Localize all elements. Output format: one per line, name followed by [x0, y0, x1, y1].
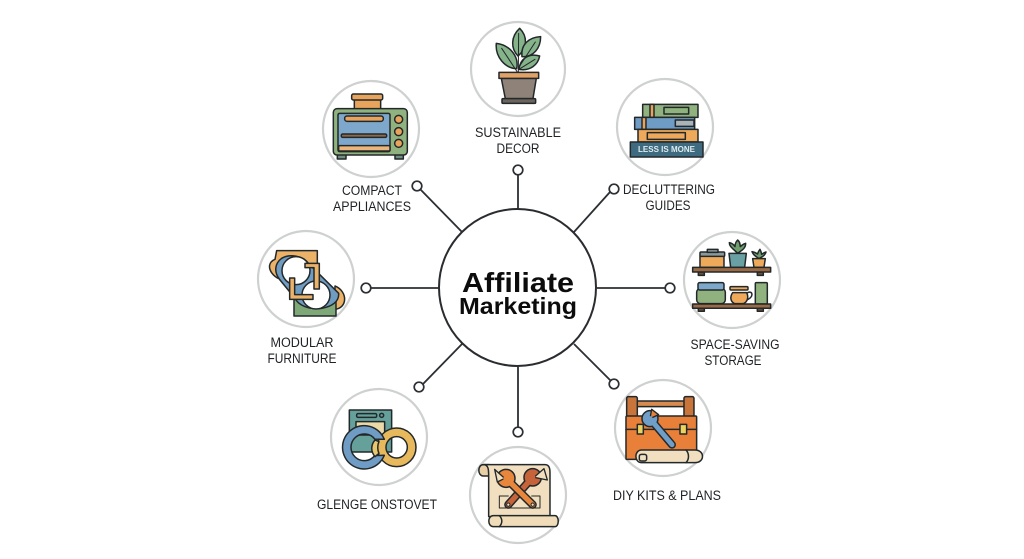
label: modular furniture: MODULAR: [270, 335, 334, 350]
icon: storage shelves: [684, 232, 780, 328]
label: compact appliances: [333, 183, 411, 214]
icon: modular furniture: [258, 231, 354, 327]
label: glenge onstovet: GLENGE ONSTOVET: [317, 497, 437, 512]
central hub: Affiliate Marketing: Affiliate: [462, 267, 574, 298]
label: sustainable decor: SUSTAINABLE: [475, 125, 561, 140]
central hub: Affiliate Marketing: Marketing: [459, 293, 577, 319]
label: compact appliances: APPLIANCES: [333, 199, 411, 214]
icon: stove with rings: [331, 389, 427, 485]
label: modular furniture: [268, 335, 336, 366]
icon: compact oven: [323, 81, 419, 177]
label: decluttering guides: DECLUTTERING: [623, 182, 715, 197]
label: decluttering guides: GUIDES: [646, 198, 690, 213]
label: DIY kits and plans: DIY KITS & PLANS: [613, 488, 721, 503]
icon: stacked books: [617, 79, 713, 175]
icon: blueprint scroll with crossed wrenches: [470, 447, 566, 543]
label: sustainable decor: [475, 125, 561, 156]
label: modular furniture: FURNITURE: [268, 351, 336, 366]
connector lines and end nodes: [361, 165, 675, 437]
icon: stacked books: LESS IS MONE: [638, 144, 695, 154]
label: space-saving storage: STORAGE: [704, 353, 762, 368]
central hub: Affiliate Marketing: [439, 209, 596, 366]
icon: potted plant: [471, 22, 565, 116]
label: space-saving storage: [690, 337, 780, 368]
label: compact appliances: COMPACT: [342, 183, 402, 198]
label: space-saving storage: SPACE-SAVING: [690, 337, 780, 352]
label: sustainable decor: DECOR: [496, 141, 540, 156]
label: decluttering guides: [623, 182, 715, 213]
icon: toolbox with wrench and plans: [615, 380, 711, 476]
